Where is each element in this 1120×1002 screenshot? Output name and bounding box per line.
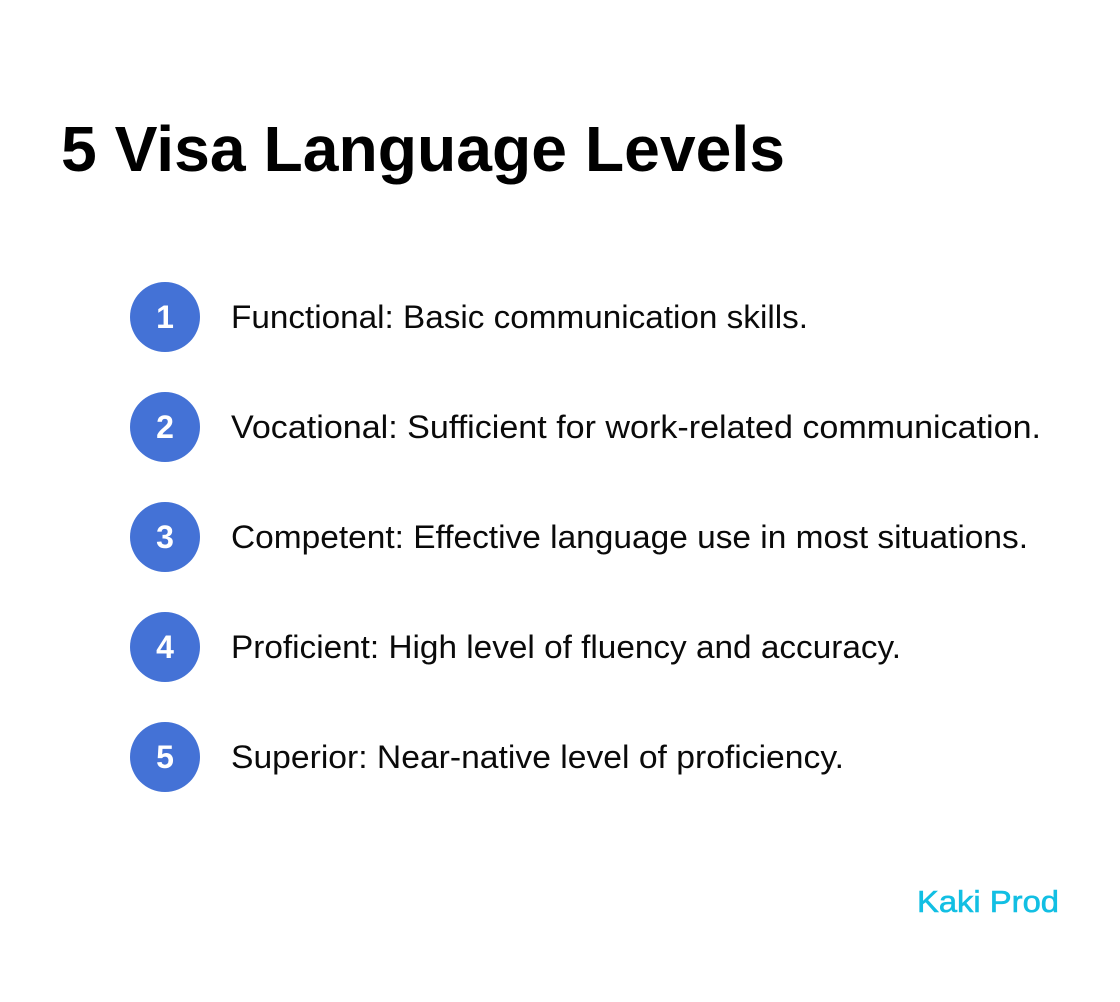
level 2 text: Vocational: Sufficient for work-related communication.: [231, 409, 1041, 445]
level 3 badge: 3: [156, 519, 174, 555]
logo: Kaki Prod: Kaki Prod: [917, 884, 1059, 919]
level 3 badge: [130, 502, 200, 572]
level 4 badge: 4: [156, 629, 174, 665]
level 4 text: Proficient: High level of fluency and accuracy.: [231, 629, 901, 665]
level 2 badge: [130, 392, 200, 462]
level 1 badge: [130, 282, 200, 352]
level 1 text: Functional: Basic communication skills.: [231, 299, 808, 335]
level 4 badge: [130, 612, 200, 682]
level 1 badge: 1: [156, 299, 174, 335]
level 5 badge: [130, 722, 200, 792]
title: 5 Visa Language Levels: [61, 113, 785, 185]
level 3 text: Competent: Effective language use in most situations.: [231, 519, 1028, 555]
list of language levels: [130, 282, 1041, 792]
level 5 text: Superior: Near-native level of proficiency.: [231, 739, 844, 775]
level 5 badge: 5: [156, 739, 174, 775]
level 2 badge: 2: [156, 409, 174, 445]
